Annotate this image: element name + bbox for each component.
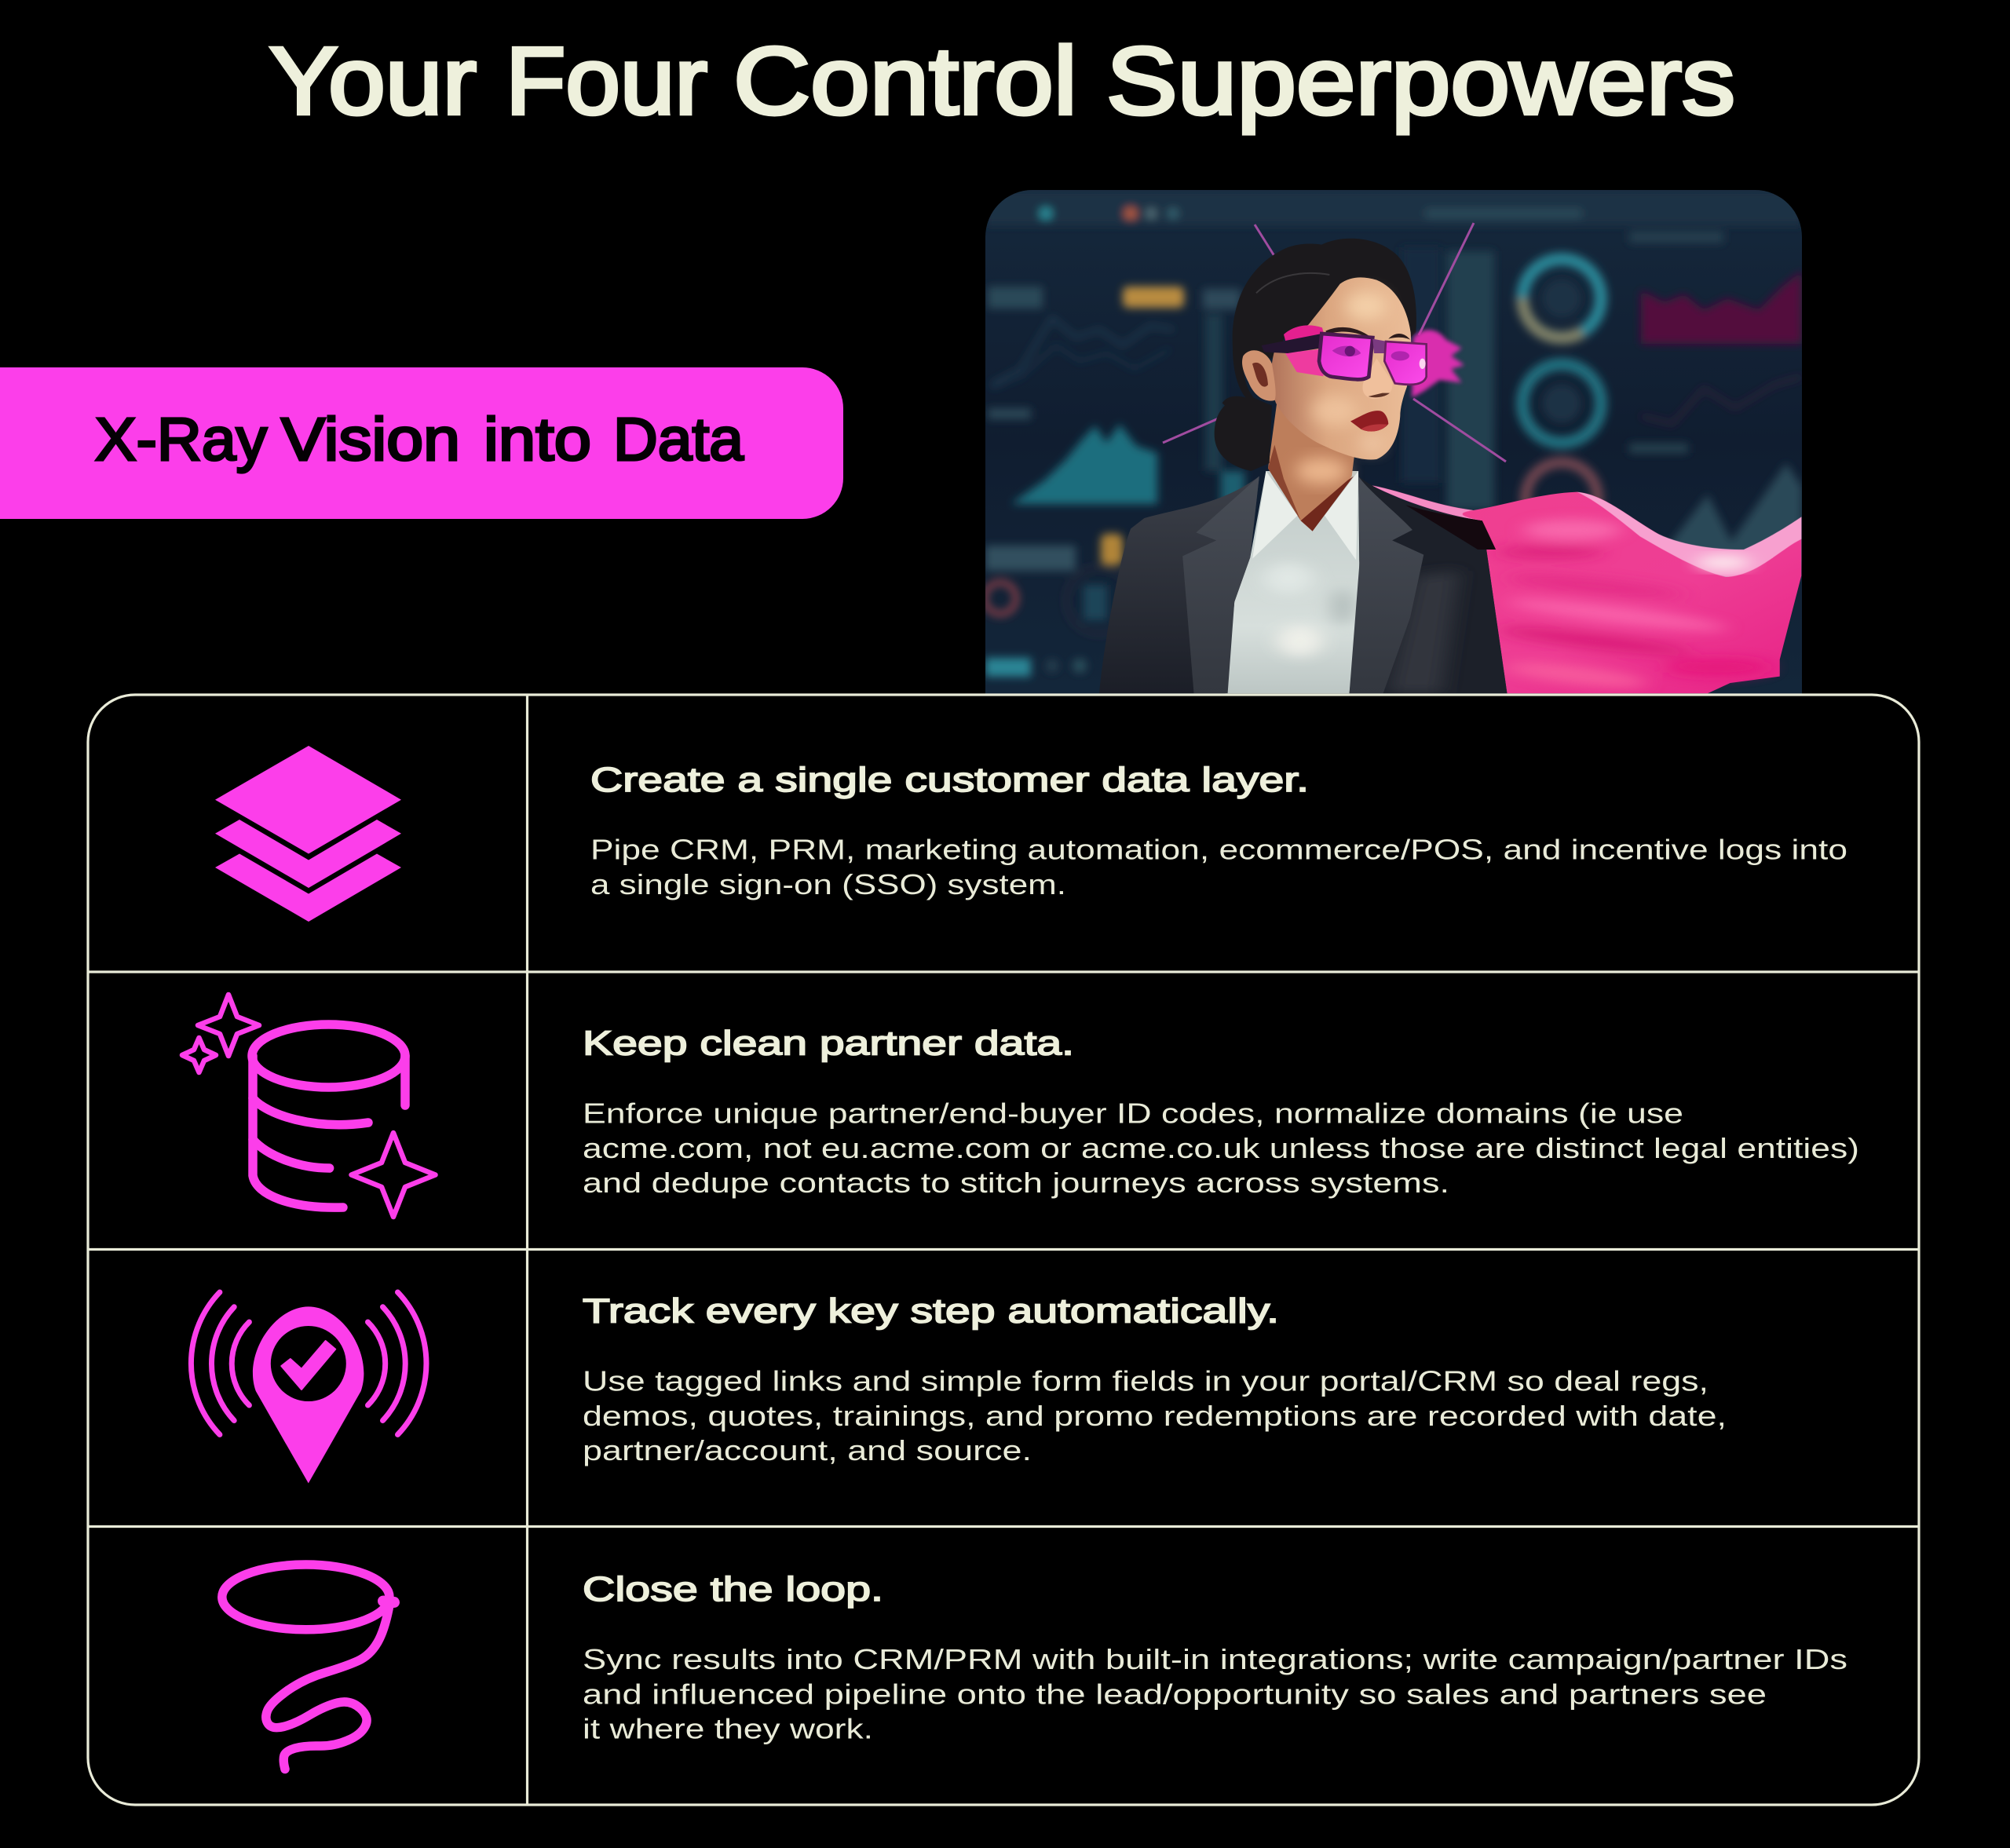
- icon: database with sparkles: [182, 995, 435, 1217]
- table frame with four rows: [88, 695, 1919, 1805]
- subheading banner: X-Ray Vision into Data: [0, 367, 843, 519]
- row 4 text: Close the loop.: [583, 1570, 883, 1609]
- cape: [1372, 485, 1801, 693]
- icon: stacked layers: [215, 746, 401, 922]
- row 3 text: partner/account, and source.: [583, 1434, 1032, 1466]
- row 3 text: demos, quotes, trainings, and promo redemptions are recorded with date,: [583, 1400, 1727, 1432]
- nose: [1362, 359, 1393, 399]
- glasses: [1262, 334, 1321, 353]
- title: [269, 27, 1735, 134]
- title: Superpowers: [1106, 27, 1735, 134]
- hair and bun: [1215, 239, 1416, 471]
- subheading banner: X-Ray Vision into Data: Data: [613, 406, 744, 473]
- title: Your: [269, 27, 477, 134]
- subheading banner: X-Ray Vision into Data: X-Ray: [95, 406, 268, 473]
- row 3 text: [583, 1292, 1727, 1466]
- icon: location pin with check and signal waves: [191, 1292, 426, 1483]
- row 1 text: Create a single customer data layer.: [590, 761, 1309, 799]
- face: [1271, 277, 1411, 460]
- title: Four: [506, 27, 707, 134]
- row 1 text: Pipe CRM, PRM, marketing automation, ecommerce/POS, and incentive logs into: [590, 834, 1847, 865]
- subheading banner: X-Ray Vision into Data: Vision: [281, 406, 460, 473]
- collar and lapels: [1182, 471, 1423, 693]
- brows: [1325, 327, 1369, 336]
- ear: [1242, 350, 1276, 401]
- row 4 text: [583, 1570, 1847, 1744]
- light rays from glasses: [1163, 223, 1506, 462]
- row 3 text: Track every key step automatically.: [583, 1292, 1279, 1330]
- row 2 text: Keep clean partner data.: [583, 1024, 1074, 1063]
- jacket: [1099, 477, 1259, 693]
- head: [1215, 239, 1464, 471]
- dashboard background: [985, 190, 1802, 677]
- pink glow around the lenses: [1284, 325, 1324, 341]
- row 2 text: [583, 1024, 1859, 1199]
- illustration: superhero businesswoman with x-ray glasses in front of dashboards: [985, 190, 1802, 694]
- row 4 text: it where they work.: [583, 1713, 873, 1744]
- face shading: [1311, 292, 1387, 450]
- row 4 text: Sync results into CRM/PRM with built-in integrations; write campaign/partner IDs: [583, 1643, 1847, 1675]
- row 1 text: a single sign-on (SSO) system.: [590, 868, 1066, 900]
- icon: lasso: [222, 1565, 394, 1769]
- cape and suit body: [1099, 471, 1801, 693]
- title: Control: [733, 27, 1077, 134]
- shirt: [1226, 471, 1360, 693]
- row 4 text: and influenced pipeline onto the lead/opportunity so sales and partners see: [583, 1678, 1767, 1710]
- row 2 text: acme.com, not eu.acme.com or acme.co.uk unless those are distinct legal entities): [583, 1132, 1859, 1164]
- neck: [1268, 400, 1354, 531]
- row 2 text: and dedupe contacts to stitch journeys across systems.: [583, 1167, 1449, 1199]
- row 2 text: Enforce unique partner/end-buyer ID codes, normalize domains (ie use: [583, 1097, 1683, 1129]
- row 3 text: Use tagged links and simple form fields in your portal/CRM so deal regs,: [583, 1364, 1708, 1397]
- lips: [1350, 411, 1388, 432]
- row 1 text: [590, 761, 1847, 900]
- subheading banner: X-Ray Vision into Data: into: [484, 406, 591, 473]
